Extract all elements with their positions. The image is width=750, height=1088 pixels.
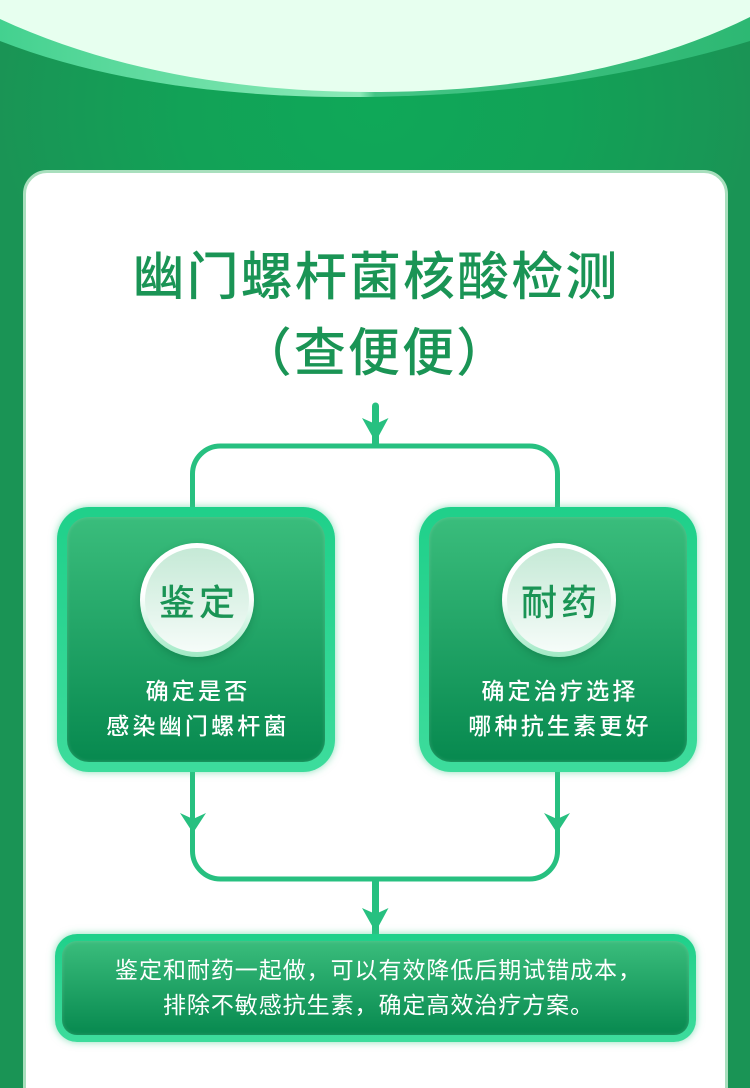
- white card: [23, 170, 728, 1088]
- description: resistance: 确定治疗选择: [481, 678, 639, 704]
- description: resistance: 哪种抗生素更好: [468, 712, 652, 738]
- description: resistance: [468, 678, 652, 738]
- panel: conclusion: [55, 934, 696, 1042]
- right down arrowhead: [544, 813, 570, 833]
- title: （查便便）: [240, 325, 510, 383]
- badge: identification: 鉴定: [159, 582, 239, 623]
- panel: resistance: [419, 507, 697, 772]
- conclusion text: 鉴定和耐药一起做，可以有效降低后期试错成本，: [115, 957, 642, 983]
- description: identification: [106, 678, 290, 738]
- top bracket: [192, 446, 558, 508]
- bottom bracket: [192, 771, 558, 879]
- badge: resistance: 耐药: [521, 582, 601, 623]
- description: identification: 感染幽门螺杆菌: [106, 712, 290, 738]
- conclusion text: 排除不敏感抗生素，确定高效治疗方案。: [163, 992, 594, 1018]
- description: identification: 确定是否: [146, 678, 250, 704]
- header curve: [0, 0, 750, 97]
- left down arrowhead: [180, 813, 206, 833]
- badge: identification: [140, 543, 254, 657]
- title: [133, 249, 619, 383]
- panel: identification: [57, 507, 335, 772]
- bottom arrow: [362, 880, 388, 936]
- conclusion text: [115, 957, 642, 1018]
- title: 幽门螺杆菌核酸检测: [133, 249, 619, 307]
- badge: resistance: [502, 543, 616, 657]
- top arrow: [362, 406, 388, 446]
